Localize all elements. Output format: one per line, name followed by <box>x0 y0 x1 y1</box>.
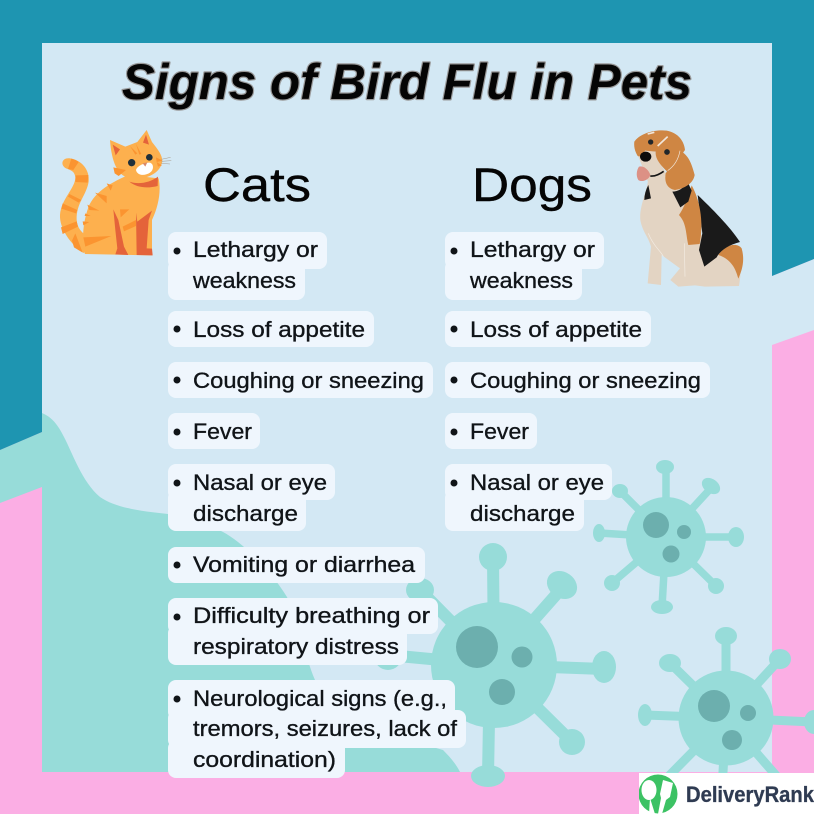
cats item: neurological <box>168 680 466 778</box>
dogs item: nasal: Nasal or eye <box>470 470 604 495</box>
dogs item: appetite: Loss of appetite <box>470 317 642 342</box>
dogs item: fever: Fever <box>470 419 530 444</box>
cats item: coughing: Coughing or sneezing <box>193 368 424 393</box>
cats item: nasal: Nasal or eye <box>193 470 327 495</box>
cats item: breathing: respiratory distress <box>193 634 399 659</box>
cats item: vomiting <box>168 547 425 583</box>
dogs item: nasal <box>445 464 612 531</box>
dogs item: coughing <box>445 362 710 398</box>
dogs item: lethargy: Lethargy or <box>470 237 596 262</box>
cats item: nasal: discharge <box>193 501 298 526</box>
dogs item: lethargy: weakness <box>469 268 573 293</box>
cats item: nasal <box>168 464 335 531</box>
cats item: vomiting: Vomiting or diarrhea <box>193 552 416 577</box>
cats item: breathing <box>168 598 438 665</box>
cats item: neurological: tremors, seizures, lack of <box>193 716 458 741</box>
title: Signs of Bird Flu in Pets <box>122 54 692 110</box>
heading: cats: Cats <box>203 158 311 211</box>
heading: dogs: Dogs <box>472 158 592 211</box>
cats item: lethargy: weakness <box>192 268 296 293</box>
cats item: coughing <box>168 362 433 398</box>
dogs item: nasal: discharge <box>470 501 575 526</box>
dogs item: coughing: Coughing or sneezing <box>470 368 701 393</box>
cats item: neurological: coordination) <box>193 747 336 772</box>
icon: beagle dog <box>634 130 743 287</box>
list: dogs symptoms <box>445 232 710 531</box>
mint wave shape <box>42 413 460 772</box>
icon: orange cat <box>60 130 171 255</box>
dogs item: fever <box>445 413 537 449</box>
dogs item: lethargy <box>445 232 604 300</box>
cats item: lethargy: Lethargy or <box>193 237 319 262</box>
cats item: appetite: Loss of appetite <box>193 317 365 342</box>
cats item: fever <box>168 413 260 449</box>
cats item: fever: Fever <box>193 419 253 444</box>
list: cats symptoms <box>168 232 466 778</box>
cats item: appetite <box>168 311 374 347</box>
logo: DeliveryRank <box>638 773 814 814</box>
virus: lower right <box>638 627 814 790</box>
cats item: neurological: Neurological signs (e.g., <box>193 686 447 711</box>
cats item: lethargy <box>168 232 327 300</box>
dogs item: appetite <box>445 311 651 347</box>
virus: upper right <box>593 460 744 614</box>
cats item: breathing: Difficulty breathing or <box>193 603 431 628</box>
virus: large <box>374 543 616 787</box>
